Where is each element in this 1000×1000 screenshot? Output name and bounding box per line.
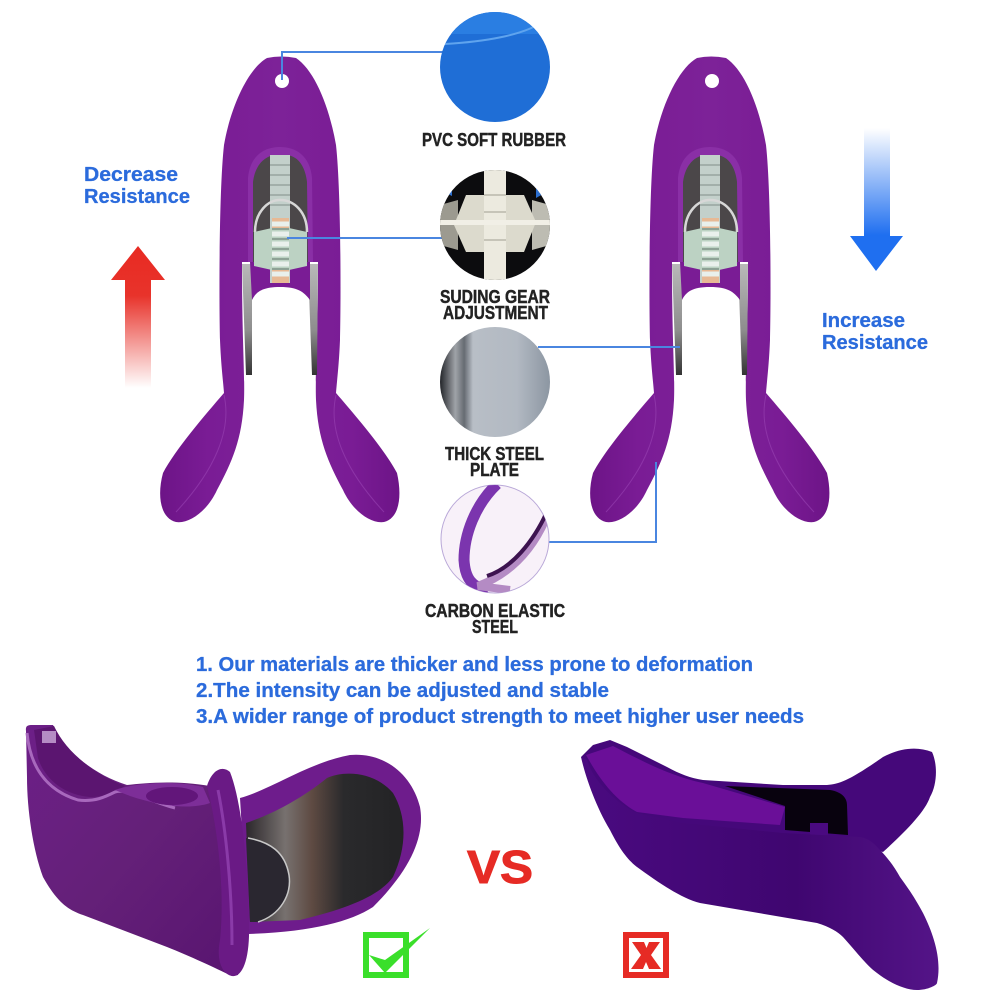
label: carbon elastic steel: STEEL	[472, 617, 518, 637]
connector: sliding gear	[287, 237, 444, 239]
arrow: red up	[111, 246, 165, 388]
product: good trainer side view	[26, 725, 421, 976]
heading: decrease resistance	[84, 163, 190, 208]
label: sliding gear adjustment: SUDING GEAR	[440, 287, 550, 307]
label: sliding gear adjustment: ADJUSTMENT	[443, 303, 548, 323]
panel: carbon elastic steel detail	[441, 484, 549, 593]
text block: feature list: 1. Our materials are thicker and less prone to deformation	[196, 653, 753, 676]
panel: gear detail	[440, 170, 550, 280]
icon: green check box	[366, 928, 430, 975]
heading: increase resistance: Increase	[822, 309, 905, 332]
label: carbon elastic steel: CARBON ELASTIC	[425, 601, 565, 621]
connector: pvc soft rubber	[282, 52, 444, 80]
label: sliding gear adjustment	[440, 287, 550, 323]
heading: increase resistance	[822, 309, 928, 354]
panel: pvc soft rubber detail	[440, 12, 550, 122]
connector: carbon elastic steel	[549, 462, 656, 542]
product: inferior trainer side view	[581, 740, 939, 990]
arrow: blue down	[850, 128, 903, 271]
heading: decrease resistance: Resistance	[84, 185, 190, 208]
product: left trainer front view	[160, 56, 399, 522]
text: vs: VS	[467, 841, 533, 893]
text block: feature list: 2.The intensity can be adjusted and stable	[196, 679, 609, 702]
heading: increase resistance: Resistance	[822, 331, 928, 354]
text block: feature list	[196, 653, 804, 728]
label: thick steel plate: PLATE	[470, 460, 519, 480]
label: thick steel plate	[445, 444, 544, 480]
label: pvc soft rubber: PVC SOFT RUBBER	[422, 130, 566, 150]
icon: red cross box	[626, 935, 666, 975]
connector: steel plate	[538, 346, 680, 348]
label: thick steel plate: THICK STEEL	[445, 444, 544, 464]
text block: feature list: 3.A wider range of product strength to meet higher user needs	[196, 705, 804, 728]
label: carbon elastic steel	[425, 601, 565, 637]
product: right trainer front view	[590, 56, 829, 522]
heading: decrease resistance: Decrease	[84, 163, 178, 186]
panel: steel plate detail	[440, 327, 550, 437]
